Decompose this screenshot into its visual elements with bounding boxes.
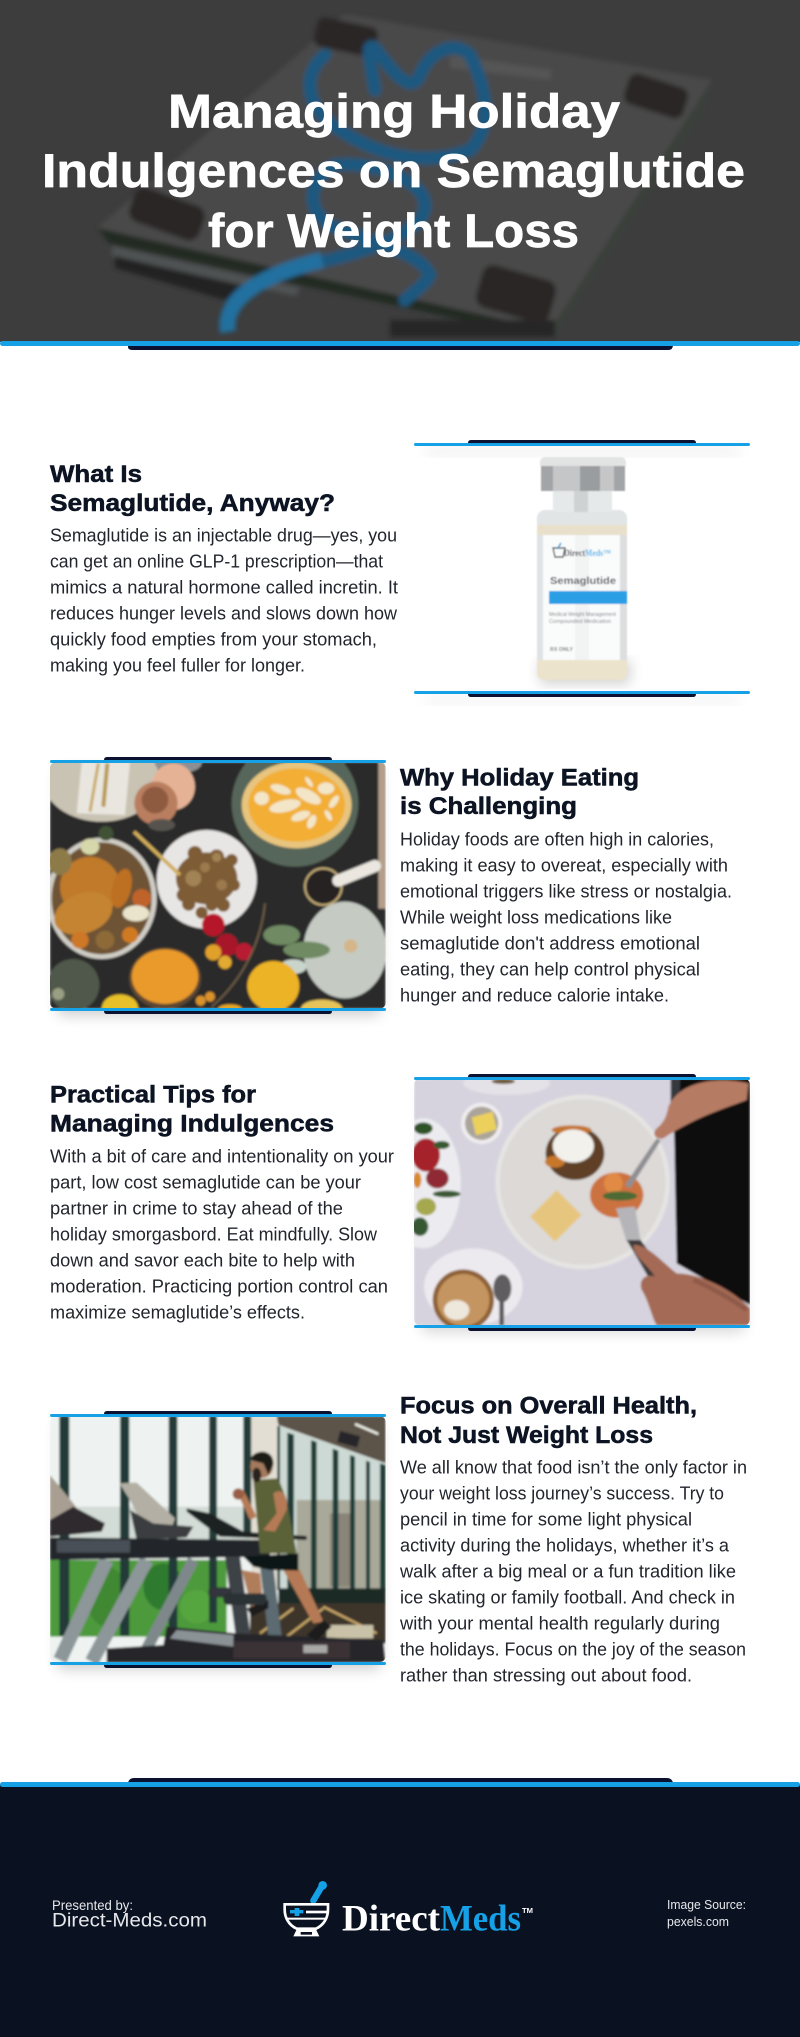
- icon: vial: Meds™: [585, 548, 611, 558]
- logo: DirectMeds: TM: [522, 1908, 533, 1915]
- body text: practical tips: partner in crime to stay ahead of the: [50, 1199, 343, 1219]
- heading: practical tips: Managing Indulgences: [50, 1111, 334, 1138]
- title: Managing Holiday: [168, 84, 620, 138]
- body text: why holiday eating: semaglutide don't address emotional: [400, 934, 700, 954]
- body text: focus on overall health: walk after a big meal or a fun tradition like: [399, 1561, 736, 1581]
- heading: what is semaglutide: What Is: [50, 461, 142, 488]
- heading: practical tips: Practical Tips for: [50, 1082, 256, 1109]
- logo: DirectMeds: [285, 1881, 533, 1940]
- footer: [0, 1778, 800, 2037]
- body text: why holiday eating: making it easy to overeat, especially with: [400, 856, 728, 876]
- header photo: scale and measuring tape: [0, 0, 800, 342]
- body text: focus on overall health: the holidays. Focus on the joy of the season: [400, 1639, 746, 1659]
- logo: DirectMeds: Meds: [440, 1899, 521, 1940]
- title: [42, 84, 745, 257]
- body text: focus on overall health: activity during the holidays, whether it’s a: [400, 1535, 730, 1555]
- body text: what is semaglutide: quickly food empties from your stomach,: [50, 630, 377, 650]
- body text: practical tips: part, low cost semaglutide can be your: [50, 1173, 361, 1193]
- header accent bars: [0, 341, 800, 350]
- icon: vial: Compounded Medication: [549, 619, 611, 625]
- plate photo accent bars: [414, 1074, 750, 1331]
- image source text: pexels.com: [667, 1914, 729, 1929]
- body text: practical tips: maximize semaglutide’s effects.: [50, 1303, 305, 1323]
- logo: DirectMeds: Direct: [342, 1899, 441, 1940]
- icon: vial: Medical Weight Management: [549, 612, 616, 618]
- icon: vial: Direct: [564, 548, 585, 558]
- body text: why holiday eating: Holiday foods are often high in calories,: [400, 830, 714, 850]
- panel: semaglutide vial image: [414, 440, 750, 704]
- body text: why holiday eating: emotional triggers like stress or nostalgia.: [400, 882, 732, 902]
- photo: plated meal with fork: [414, 1080, 750, 1325]
- heading: why holiday eating: Why Holiday Eating: [400, 765, 639, 792]
- image source text: [667, 1897, 746, 1929]
- body text: focus on overall health: We all know that food isn’t the only factor in: [400, 1457, 747, 1477]
- body text: practical tips: down and savor each bite to help with: [50, 1251, 355, 1271]
- body text: what is semaglutide: mimics a natural hormone called incretin. It: [50, 578, 398, 598]
- heading: why holiday eating: [400, 765, 639, 820]
- title: for Weight Loss: [208, 204, 579, 257]
- body text: focus on overall health: [399, 1457, 747, 1685]
- section 3: practical tips: [50, 1072, 750, 1332]
- header banner: [0, 0, 800, 350]
- heading: what is semaglutide: Semaglutide, Anyway?: [50, 490, 335, 517]
- photo: man running on treadmill: [50, 1416, 386, 1663]
- heading: focus on overall health: Focus on Overall Health,: [400, 1393, 697, 1420]
- body text: why holiday eating: While weight loss medications like: [400, 908, 672, 928]
- photo: holiday food spread: [50, 763, 386, 1008]
- presented by text: [52, 1897, 207, 1932]
- section 4: focus on overall health: [50, 1393, 747, 1685]
- panel: treadmill photo: [50, 1411, 386, 1669]
- body text: why holiday eating: hunger and reduce calorie intake.: [400, 986, 669, 1006]
- treadmill photo accent bars: [50, 1411, 386, 1668]
- body text: what is semaglutide: can get an online GLP-1 prescription—that: [50, 552, 383, 572]
- icon: vial: [537, 457, 627, 680]
- icon: vial: Semaglutide: [550, 575, 616, 587]
- vial panel accent bars: [414, 440, 750, 697]
- body text: focus on overall health: rather than stressing out about food.: [400, 1665, 692, 1685]
- body text: what is semaglutide: Semaglutide is an injectable drug—yes, you: [50, 526, 397, 546]
- body text: practical tips: With a bit of care and intentionality on your: [50, 1147, 394, 1167]
- panel: holiday table photo: [43, 738, 387, 1022]
- icon: mortar and pestle: [285, 1881, 328, 1936]
- body text: what is semaglutide: reduces hunger levels and slows down how: [50, 604, 398, 624]
- body text: why holiday eating: eating, they can help control physical: [400, 960, 700, 980]
- body text: practical tips: [50, 1147, 394, 1323]
- section 2: why holiday eating is challenging: [43, 738, 732, 1022]
- heading: what is semaglutide: [50, 461, 335, 517]
- body text: what is semaglutide: making you feel fuller for longer.: [50, 656, 305, 676]
- body text: focus on overall health: your weight loss journey’s success. Try to: [400, 1483, 724, 1503]
- body text: focus on overall health: ice skating or family football. And check in: [400, 1587, 735, 1607]
- heading: practical tips: [50, 1082, 334, 1138]
- panel: plated meal photo: [386, 1072, 750, 1332]
- icon: vial: RX ONLY: [550, 647, 573, 653]
- title: Indulgences on Semaglutide: [42, 144, 745, 197]
- body text: what is semaglutide: [50, 526, 398, 676]
- image source text: Image Source:: [667, 1897, 746, 1912]
- body text: practical tips: holiday smorgasbord. Eat mindfully. Slow: [50, 1225, 378, 1245]
- footer background: [0, 1784, 800, 2037]
- section 1: what is semaglutide: [50, 440, 750, 704]
- presented by text: Direct-Meds.com: [52, 1911, 207, 1932]
- food photo accent bars: [50, 757, 386, 1014]
- presented by text: Presented by:: [52, 1897, 133, 1913]
- heading: why holiday eating: is Challenging: [400, 793, 577, 820]
- footer accent bars: [0, 1778, 800, 1787]
- body text: focus on overall health: pencil in time for some light physical: [400, 1509, 692, 1529]
- body text: why holiday eating: [400, 830, 732, 1006]
- body text: focus on overall health: with your mental health regularly during: [399, 1613, 720, 1633]
- heading: focus on overall health: [400, 1393, 697, 1449]
- body text: practical tips: moderation. Practicing portion control can: [50, 1277, 388, 1297]
- heading: focus on overall health: Not Just Weight Loss: [400, 1422, 653, 1449]
